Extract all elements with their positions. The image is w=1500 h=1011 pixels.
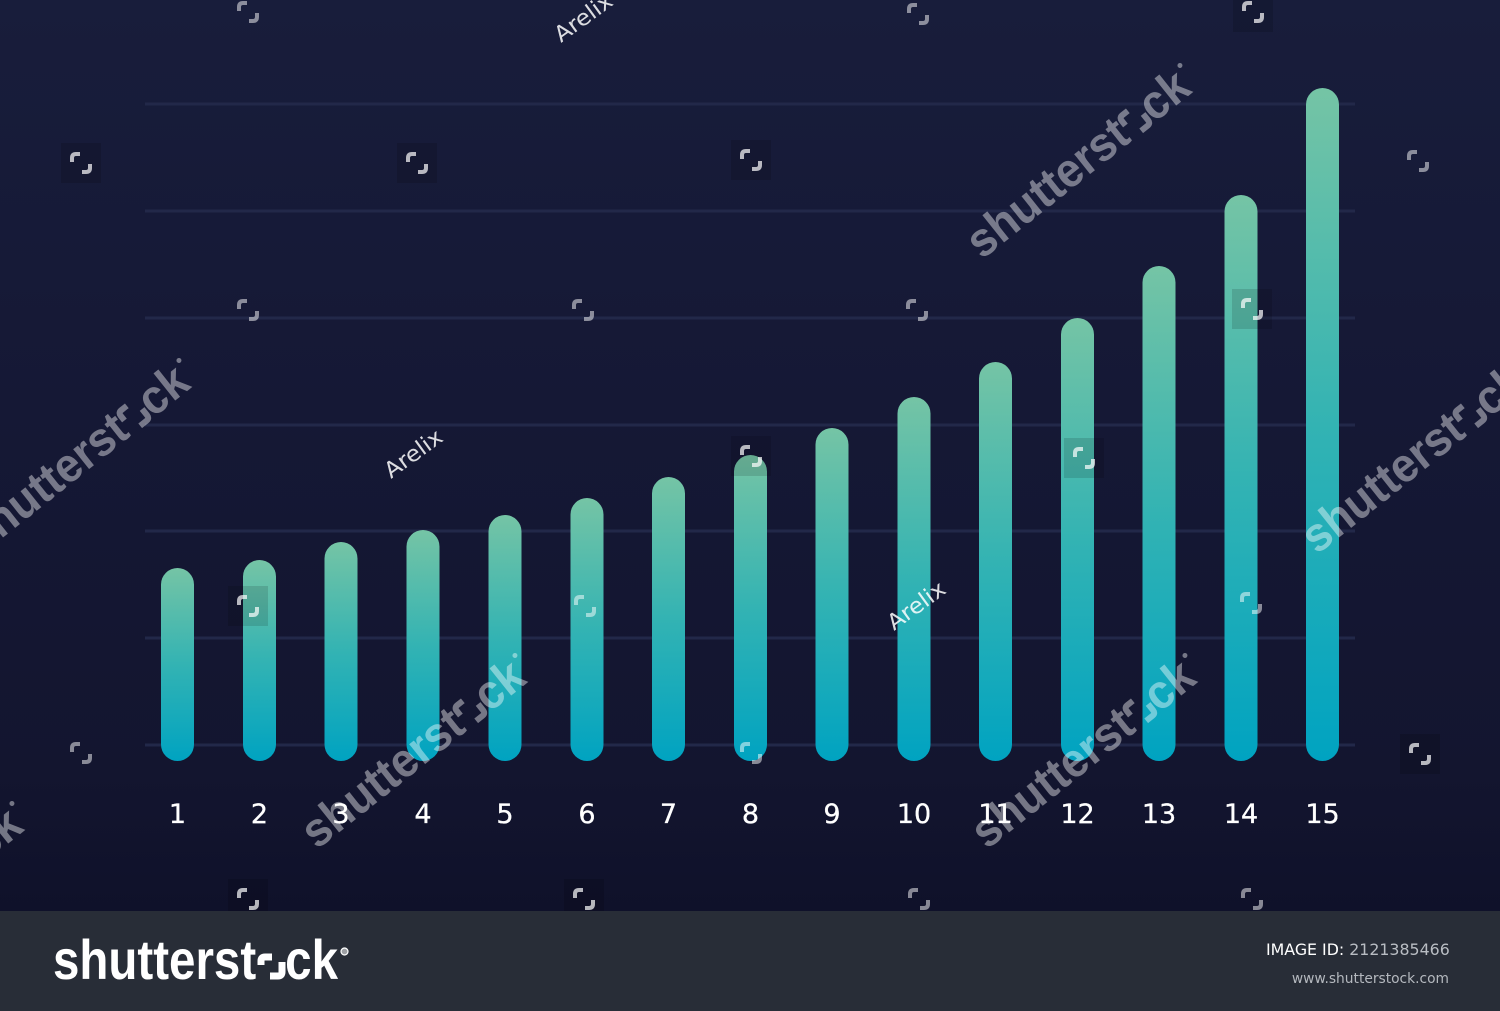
footer logo: shutterstock (53, 928, 339, 991)
axis labels: 15 (1305, 799, 1340, 830)
axis labels: 12 (1060, 799, 1095, 830)
watermark: Arelix (380, 0, 951, 636)
image id: IMAGE ID: 2121385466 (1266, 940, 1450, 959)
watermark: Arelix: Arelix (883, 577, 951, 636)
watermark: shutterstock: shutterstock (961, 649, 1205, 859)
website: www.shutterstock.com (1292, 971, 1449, 987)
axis labels: 4 (414, 799, 432, 830)
axis labels: 5 (496, 799, 514, 830)
axis labels: 8 (742, 799, 759, 830)
watermark: Arelix: Arelix (380, 425, 448, 484)
chart gridlines (145, 104, 1355, 745)
axis labels: 3 (332, 799, 350, 830)
axis labels: 10 (897, 799, 931, 830)
axis labels: 1 (169, 799, 186, 830)
axis labels: 13 (1142, 799, 1176, 830)
watermark: shutterstock: shutterstock (291, 649, 535, 859)
axis labels: 9 (823, 799, 841, 830)
axis labels: 2 (251, 799, 268, 830)
axis labels (169, 799, 1340, 830)
registered mark (341, 948, 348, 955)
axis labels: 14 (1224, 799, 1258, 830)
axis labels: 7 (660, 799, 677, 830)
axis labels: 6 (578, 799, 596, 830)
watermark: shutterstock: shutterstock (956, 59, 1200, 269)
footer bar (0, 911, 1500, 1011)
bar chart (161, 88, 1339, 761)
axis labels: 11 (978, 799, 1013, 830)
